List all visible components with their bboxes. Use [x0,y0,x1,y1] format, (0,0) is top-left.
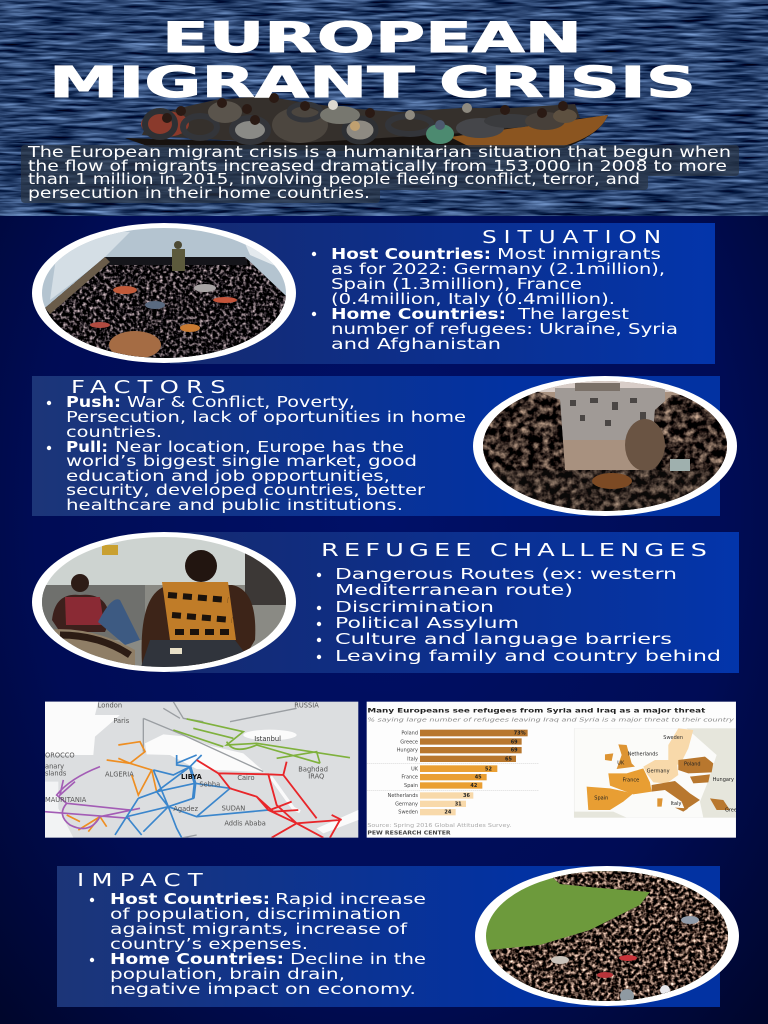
map labels: IRAQ [308,773,324,781]
bullet list: host and home countries: (0.4million, Italy (0.4million). [331,290,615,308]
bullet list: push and pull [47,393,466,514]
choropleth map of Europe [574,728,743,818]
purple route [45,767,140,829]
intro text with dark highlight [21,143,739,203]
bullet list: host and home country impact: Host Countries: [110,890,270,908]
choropleth map of Europe: Netherlands [628,752,658,758]
bar chart: Spain [404,783,418,789]
bullet list: push and pull: War & Conflict, Poverty, [127,393,355,411]
bullet list: host and home country impact: country’s expenses. [110,935,308,953]
choropleth map of Europe: Sweden [663,735,683,741]
choropleth map of Europe: Spain [594,795,608,801]
map labels: Sebha [199,780,220,788]
choropleth map of Europe: Germany [647,768,670,774]
bar chart: Netherlands [388,793,418,799]
choropleth map of Europe: Hungary [713,777,734,783]
heading: factors: FACTORS [71,377,233,398]
heading: impact: IMPACT [77,870,210,891]
bar chart: France [401,775,418,781]
photo: destroyed city street [473,376,737,516]
map labels: London [98,702,122,710]
heading: refugee challenges: REFUGEE CHALLENGES [321,540,712,561]
bullet list: push and pull: Pull: [66,438,108,456]
map labels: Addis Ababa [224,820,266,828]
bar chart: 52 [485,766,493,772]
map labels: Agadez [173,805,198,813]
title: MIGRANT CRISIS [49,58,696,108]
chart source: Source: Spring 2016 Global Attitudes Survey. [367,823,512,829]
bar chart: Sweden [398,810,418,816]
bullet list: challenges: Leaving family and country behind [335,647,721,665]
bar chart: Hungary [397,748,418,754]
bar chart: 73% [514,731,526,737]
bar chart: UK [411,766,419,772]
bar chart: 31 [455,801,462,807]
map labels: Istanbul [254,735,281,743]
bullet list: challenges [317,565,721,665]
bullet list: push and pull: Persecution, lack of oportunities in home [66,408,466,426]
bullet list: host and home countries [312,245,678,353]
map labels: SUDAN [222,805,245,813]
bullet list: host and home countries: Host Countries: [331,245,491,263]
bullet list: push and pull: security, developed countries, better [66,481,426,499]
chart source [367,823,512,837]
bullet list: host and home countries: and Afghanistan [331,335,501,353]
bullet list: host and home country impact: Decline in the [290,950,426,968]
bullet list: host and home country impact [90,890,426,998]
panel: refugee challenges [170,532,739,673]
map labels: ALGERIA [105,771,134,779]
bullet list: challenges: Political Assylum [335,614,519,632]
bullet list: challenges: Culture and language barriers [335,630,672,648]
photo: crowd of migrants walking [475,866,739,1006]
bullet list: host and home countries: number of refugees: Ukraine, Syria [331,320,678,338]
bar chart: 42 [470,783,478,789]
map labels [45,702,328,828]
bullet list: push and pull: Near location, Europe has the [115,438,404,456]
choropleth map of Europe: Italy [671,801,681,807]
bar chart: Germany [395,801,418,807]
bullet list: challenges: Mediterranean route) [335,581,573,599]
bullet list: host and home countries: Home Countries: [331,305,506,323]
map labels: Baghdad [298,765,328,773]
title [49,13,696,108]
green route [173,719,350,763]
bar chart: 45 [475,775,482,781]
chart title: Many Europeans see refugees from Syria and Iraq as a major threat [367,707,705,714]
bullet list: host and home country impact: population, brain drain, [110,965,345,983]
bullet list: challenges: Dangerous Routes (ex: western [335,565,677,583]
map: migration routes [45,702,358,838]
bullet list: host and home country impact: against migrants, increase of [110,920,408,938]
bar chart: 36 [463,793,471,799]
seated man left [71,574,89,592]
map labels: Paris [113,717,130,725]
bar chart: 69 [511,748,518,754]
photo: crowded rescue boat [32,223,296,363]
bullet list: host and home countries: Spain (1.3million), France [331,275,582,293]
seated man center [185,550,217,582]
bullet list: push and pull: healthcare and public institutions. [66,496,403,514]
bullet list: host and home country impact: negative impact on economy. [110,980,416,998]
bar chart [367,730,538,816]
bullet list: host and home countries: as for 2022: Germany (2.1million), [331,260,665,278]
bar chart: Italy [407,756,418,762]
bullet list: host and home country impact: Rapid increase [275,890,426,908]
map labels: anary [45,762,64,770]
map labels: LIBYA [181,773,203,781]
choropleth map of Europe: France [623,778,639,784]
seas [45,702,120,755]
intro text with dark highlight: the flow of migrants increased dramatically from 153,000 in 2008 to more [28,157,727,175]
map labels: Cairo [237,774,255,782]
blue route [115,755,268,838]
heading: situation: SITUATION [482,227,668,248]
bullet list: push and pull: world’s biggest single market, good [66,452,417,470]
photo: refugees on ship deck [32,532,296,672]
title: EUROPEAN [162,13,582,62]
chart source: PEW RESEARCH CENTER [367,831,451,837]
intro text with dark highlight: persecution in their home countries. [28,184,370,202]
bar chart: 69 [511,739,518,745]
choropleth map of Europe: UK [617,760,625,766]
bar chart: 24 [444,810,452,816]
bullet list: host and home country impact: of population, discrimination [110,905,401,923]
panel: impact [57,866,720,1007]
grey routes [143,702,297,838]
red route [197,760,342,838]
chart subtitle: % saying large number of refugees leaving Iraq and Syria is a major threat to their country [367,718,735,724]
boat with people [125,93,608,151]
bullet list: challenges: Discrimination [335,598,494,616]
bullet list: host and home countries: Most inmigrants [497,245,661,263]
bullet list: push and pull: education and job opportunities, [66,467,390,485]
choropleth map of Europe: Greece [725,808,743,814]
bullet list: host and home country impact: Home Countries: [110,950,284,968]
map labels: OROCCO [45,751,75,759]
panel: factors [32,376,720,516]
intro text with dark highlight: than 1 million in 2015, involving people fleeing conflict, terror, and [28,170,640,188]
map labels: MAURITANIA [45,796,87,804]
panel: situation [170,223,715,364]
choropleth map of Europe: Poland [684,762,701,768]
header photo: migrants in a boat at sea [0,0,768,216]
orange route [67,742,157,832]
intro text with dark highlight: The European migrant crisis is a humanitarian situation that begun when [27,143,731,161]
map labels: RUSSIA [294,702,319,710]
bar chart: Poland [401,731,418,737]
bullet list: push and pull: countries. [66,423,162,441]
map labels: slands [45,770,67,778]
bullet list: host and home countries: The largest [517,305,629,323]
bullet list: push and pull: Push: [66,393,121,411]
bar chart: Greece [400,739,418,745]
bar chart: 65 [505,756,513,762]
chart: Europeans see refugees as a major threat [367,702,743,838]
